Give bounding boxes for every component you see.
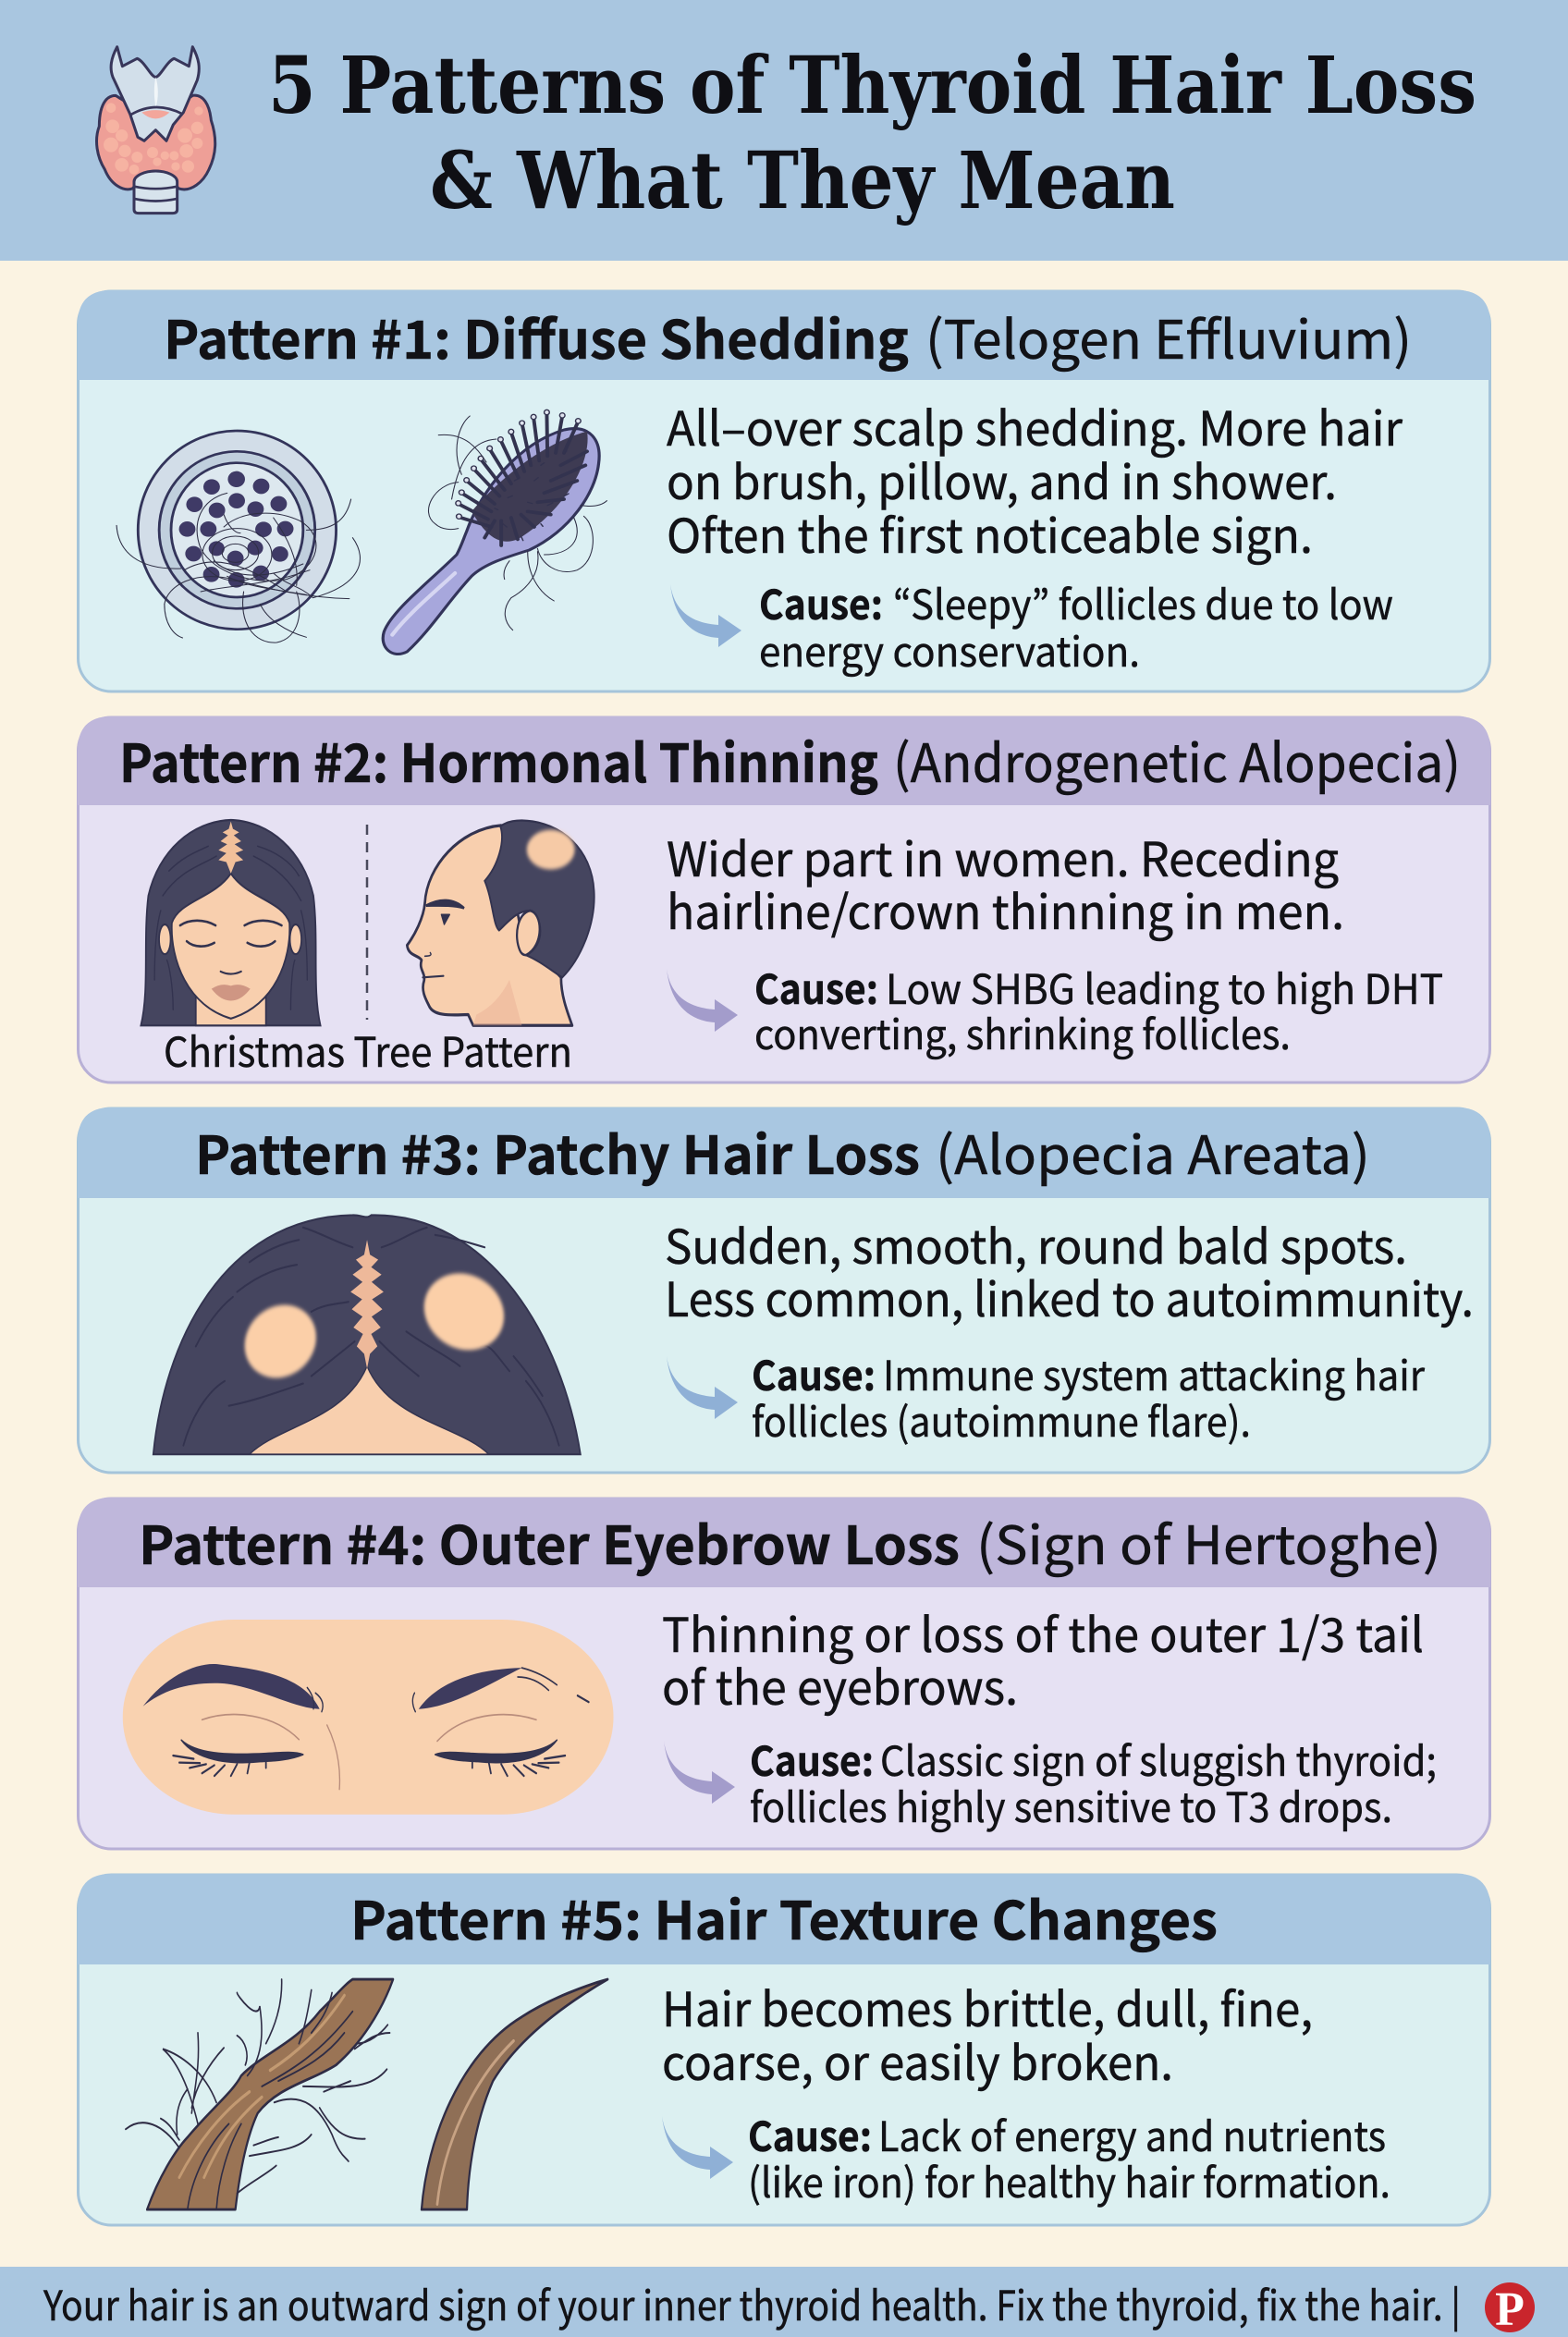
icon: pinterest logo — [1485, 2282, 1535, 2336]
cause text — [748, 2104, 1390, 2209]
title: & What They Mean — [430, 135, 1175, 227]
description text — [667, 391, 1403, 567]
cause text: (like iron) for healthy hair formation. — [748, 2150, 1390, 2209]
icon: pinterest logo: P — [1495, 2283, 1525, 2336]
heading: Pattern #4: Outer Eyebrow Loss — [139, 1504, 960, 1580]
cause text: “Sleepy” follicles due to low — [893, 572, 1393, 631]
cause text: Immune system attacking hair — [883, 1343, 1426, 1402]
cause text: Cause: — [759, 572, 883, 631]
heading: (Alopecia Areata) — [936, 1114, 1370, 1190]
cause text: Cause: — [752, 1343, 876, 1402]
arrow — [670, 584, 741, 647]
cause text — [754, 957, 1443, 1061]
cause text — [752, 1343, 1426, 1449]
description text — [665, 1209, 1474, 1330]
heading: Pattern #2: Hormonal Thinning — [119, 722, 878, 798]
heading — [164, 299, 1412, 374]
illustration: eyes and eyebrows — [123, 1620, 614, 1815]
cause text — [750, 1729, 1437, 1834]
caption: Christmas Tree Pattern — [164, 1020, 572, 1079]
cause text: Classic sign of sluggish thyroid; — [880, 1729, 1437, 1788]
cause text: Low SHBG leading to high DHT — [886, 957, 1443, 1016]
description text — [662, 1972, 1313, 2094]
description text: All–over scalp shedding. More hair — [667, 391, 1403, 459]
icon: hairbrush with hair — [383, 410, 606, 655]
description text: hairline/crown thinning in men. — [667, 875, 1344, 943]
arrow — [662, 2116, 733, 2179]
cause text: converting, shrinking follicles. — [754, 1002, 1291, 1061]
heading — [139, 1504, 1441, 1580]
arrow — [667, 1356, 738, 1419]
title — [268, 40, 1476, 227]
description text: coarse, or easily broken. — [662, 2025, 1173, 2094]
icon: shower drain with hair — [116, 431, 360, 642]
description text: Often the first noticeable sign. — [667, 498, 1313, 567]
illustration: damaged and healthy hair strands — [126, 1979, 607, 2209]
description text: Sudden, smooth, round bald spots. — [665, 1209, 1407, 1278]
heading — [119, 722, 1461, 798]
description text — [662, 1597, 1424, 1719]
heading: (Sign of Hertoghe) — [976, 1504, 1441, 1580]
cause text: Cause: — [750, 1729, 874, 1788]
cause text: follicles (autoimmune flare). — [752, 1389, 1251, 1449]
illustration: man with receding hairline — [407, 820, 594, 1025]
arrow — [667, 969, 738, 1032]
cause text: energy conservation. — [759, 619, 1140, 679]
description text: Wider part in women. Receding — [667, 822, 1339, 890]
cause text: Lack of energy and nutrients — [878, 2104, 1386, 2163]
cause text — [759, 572, 1393, 679]
arrow — [664, 1741, 735, 1804]
panel: pattern 1 diffuse shedding — [78, 290, 1490, 691]
description text: Less common, linked to autoimmunity. — [665, 1262, 1474, 1330]
cause text: follicles highly sensitive to T3 drops. — [750, 1775, 1392, 1834]
cause text: Cause: — [754, 957, 878, 1016]
footer banner — [0, 2267, 1568, 2337]
heading: Pattern #1: Diffuse Shedding — [164, 299, 909, 374]
panel: pattern 3 patchy hair loss — [78, 1107, 1490, 1473]
heading: (Androgenetic Alopecia) — [893, 722, 1461, 798]
description text — [667, 822, 1344, 943]
illustration: woman with widened part — [141, 820, 321, 1025]
description text: Thinning or loss of the outer 1/3 tail — [662, 1597, 1424, 1666]
heading — [195, 1114, 1370, 1190]
heading: Pattern #3: Patchy Hair Loss — [195, 1114, 920, 1190]
panel: pattern 5 hair texture changes — [78, 1874, 1490, 2225]
divider dashes — [366, 825, 368, 1020]
heading: Pattern #5: Hair Texture Changes — [350, 1879, 1218, 1955]
description text: on brush, pillow, and in shower. — [667, 445, 1337, 513]
icon: thyroid gland — [97, 47, 215, 214]
panel: pattern 2 hormonal thinning — [78, 716, 1490, 1083]
cause text: Cause: — [748, 2104, 872, 2163]
header banner — [0, 0, 1568, 261]
panel: pattern 4 outer eyebrow loss — [78, 1498, 1490, 1849]
heading: (Telogen Effluvium) — [925, 299, 1412, 374]
illustration: scalp with round bald patches — [153, 1215, 581, 1454]
description text: of the eyebrows. — [662, 1650, 1018, 1719]
description text: Hair becomes brittle, dull, fine, — [662, 1972, 1313, 2040]
